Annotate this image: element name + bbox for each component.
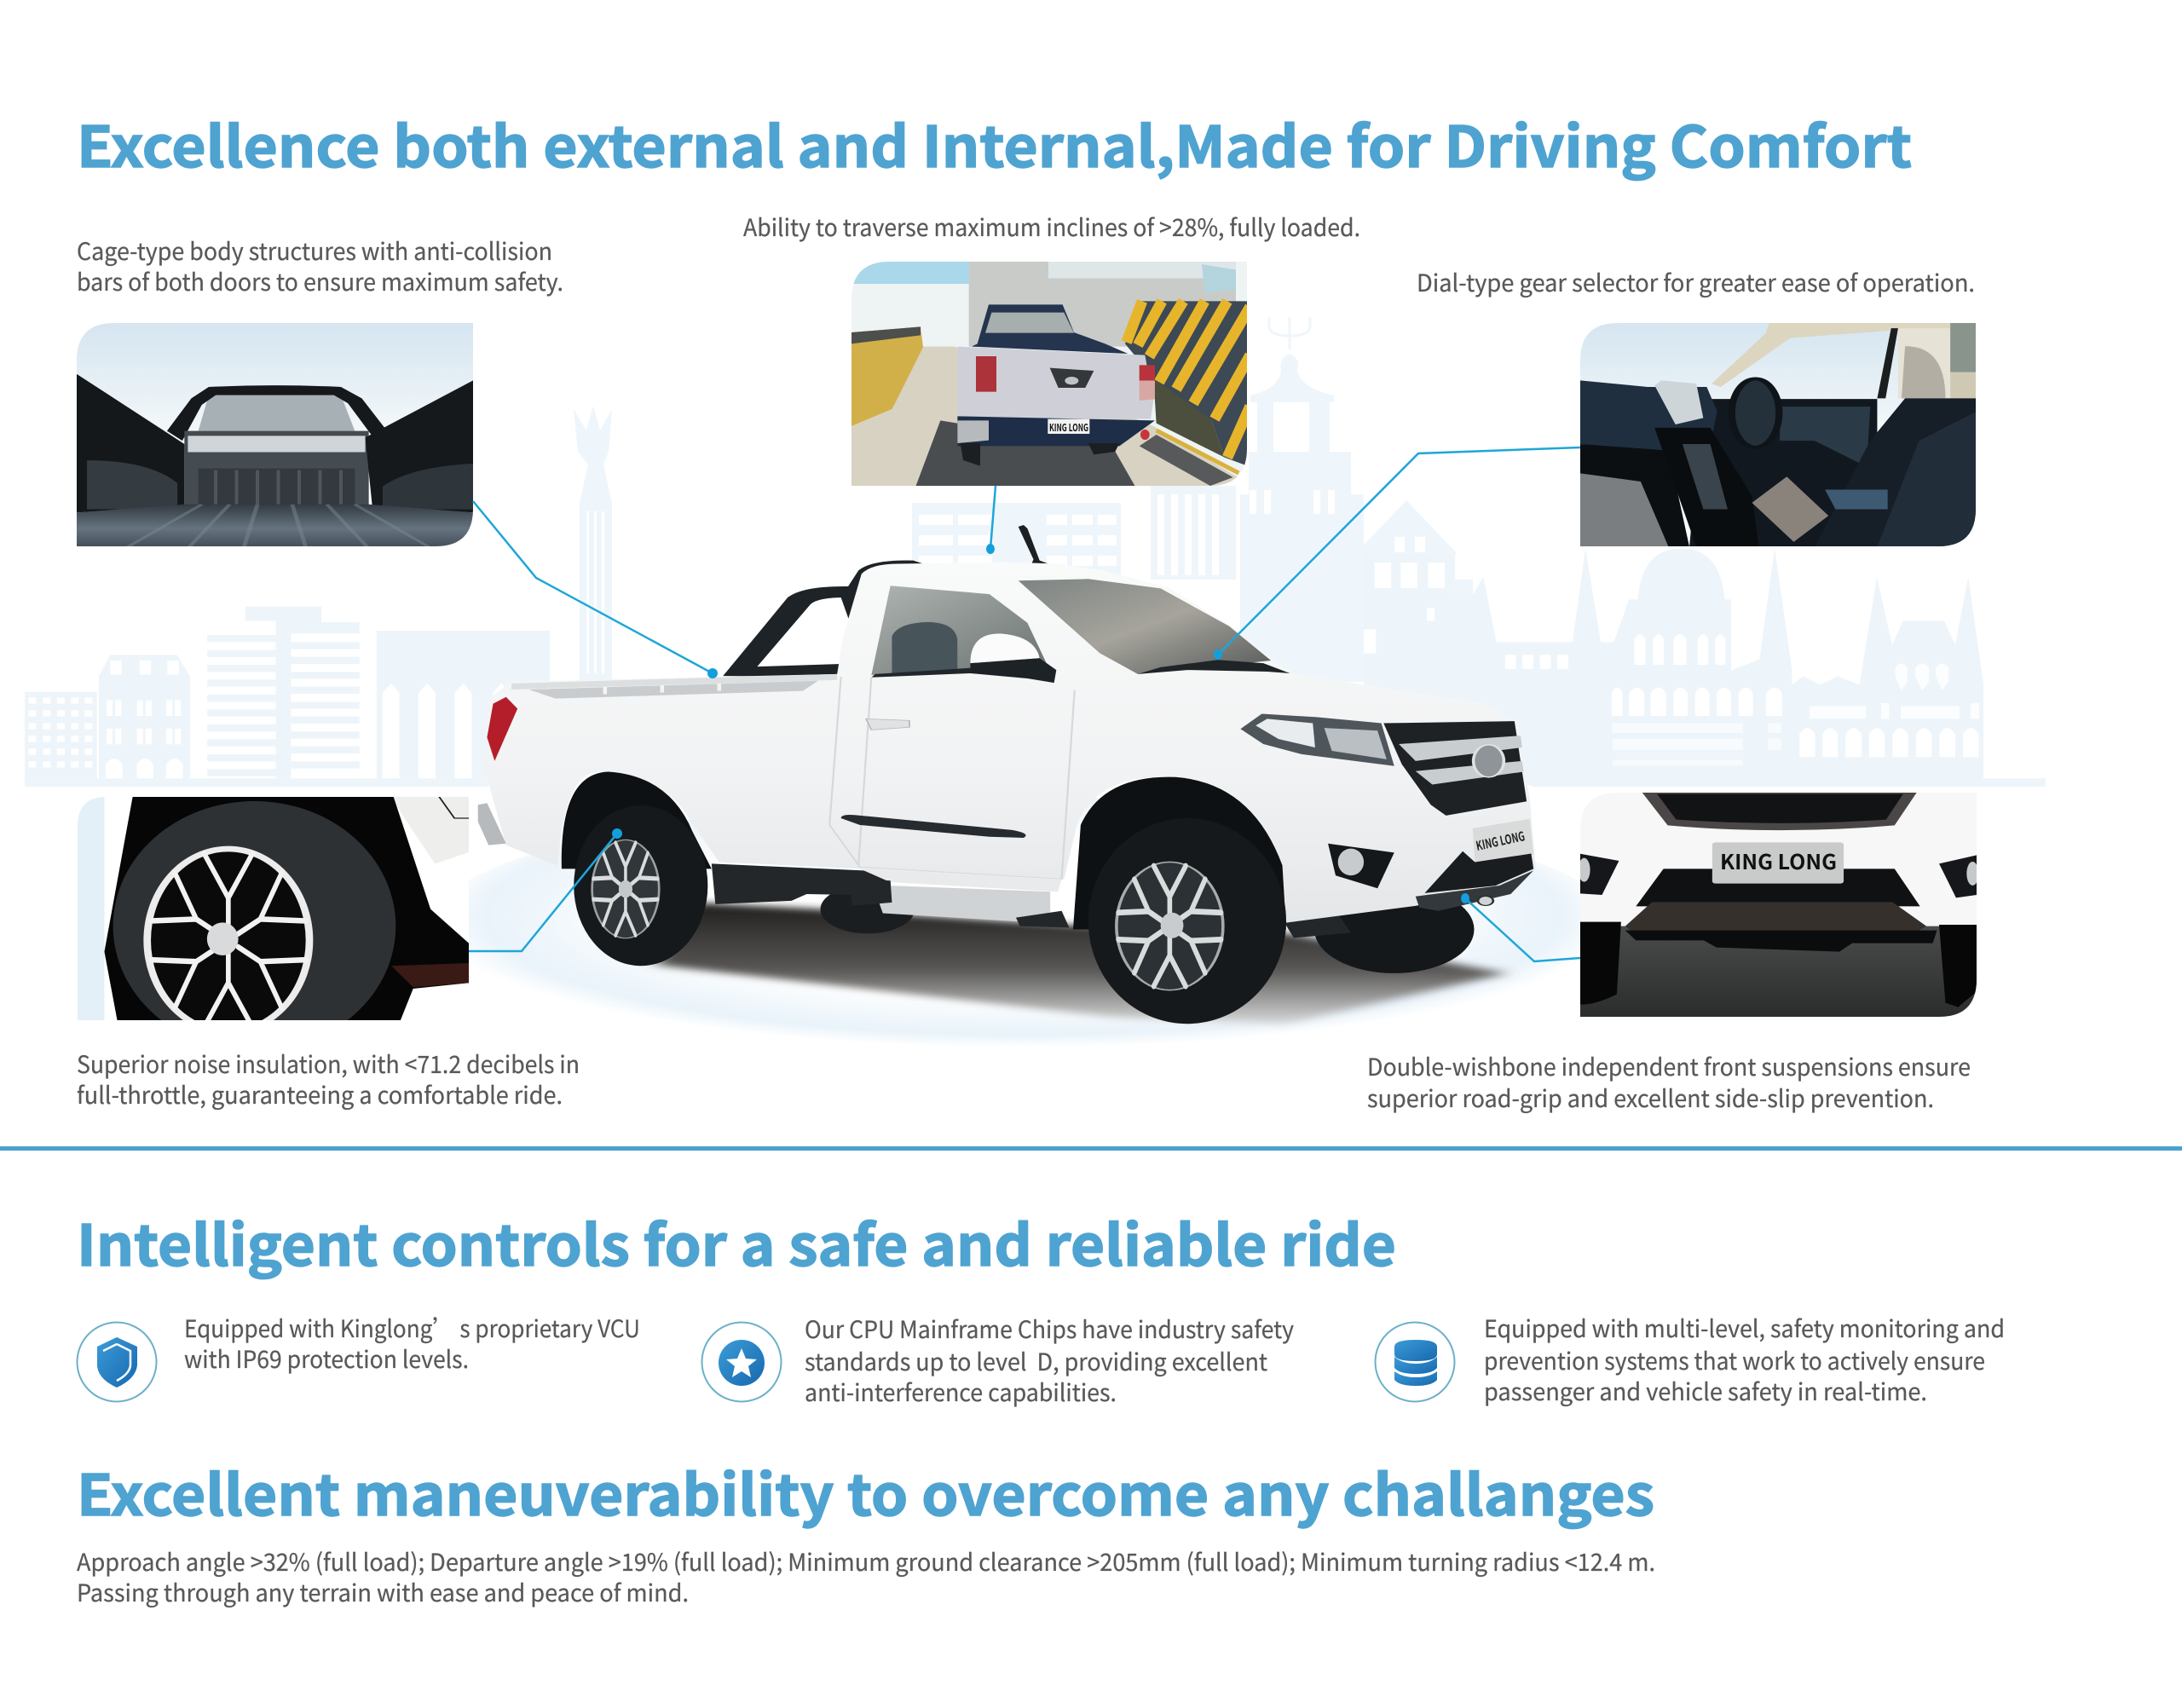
heading: intelligent controls: Intelligent controls for a safe and reliable ride: [77, 1201, 1396, 1283]
running board: [849, 868, 1070, 928]
plate text: KING LONG: [1720, 845, 1837, 875]
truck shadow: [655, 903, 1507, 1024]
background: [448, 883, 469, 943]
lower intake: [1424, 851, 1533, 893]
sky: [851, 262, 1247, 486]
city skyline background: [25, 317, 2046, 787]
ground: [1580, 926, 1977, 1017]
far front wheel: [1314, 886, 1475, 973]
text: monitoring: prevention systems that work to actively ensure: [1484, 1343, 1985, 1377]
ground ellipse under truck: [426, 797, 1619, 1061]
lower intake: [1636, 868, 1920, 906]
text: monitoring: Equipped with multi-level, safety monitoring and: [1484, 1311, 2005, 1345]
plate text: KING LONG: [1049, 420, 1088, 435]
icon: star: [702, 1323, 781, 1401]
road: [851, 347, 1247, 488]
panel: cargo bed photo: [77, 323, 473, 548]
bed floor: [77, 505, 473, 548]
tires: [1580, 922, 1621, 1004]
headlight: [1240, 713, 1394, 766]
lower barrier: [1153, 378, 1225, 458]
text: maneuverability details: Passing through any terrain with ease and peace of mind.: [77, 1575, 689, 1609]
divider line: [0, 1146, 2182, 1151]
text: CPU chips: anti-interference capabilities.: [805, 1375, 1117, 1409]
tail light: [487, 697, 517, 761]
front wheel: [1088, 818, 1286, 1024]
cab window: [199, 395, 355, 431]
text: CPU chips: standards up to level D, providing excellent: [805, 1344, 1267, 1378]
text: cage-type body: bars of both doors to ensure maximum safety.: [77, 264, 563, 298]
lower seat: [1752, 476, 1828, 542]
license plate text: KING LONG: [1475, 827, 1527, 855]
mud flap: [391, 963, 469, 987]
wall: [969, 262, 1236, 347]
screen: [1654, 380, 1703, 424]
text: cage-type body: [77, 234, 563, 298]
grille: [1642, 793, 1917, 830]
text: noise insulation: full-throttle, guaranteeing a comfortable ride.: [77, 1077, 563, 1111]
cab lower: [184, 431, 369, 506]
wheel arches: [87, 460, 177, 510]
center console: [1654, 428, 1759, 547]
text: noise insulation: Superior noise insulation, with <71.2 decibels in: [77, 1047, 580, 1081]
roll bar: [723, 586, 849, 677]
icon: shield: [77, 1323, 157, 1401]
text: suspension: superior road-grip and excellent side-slip prevention.: [1367, 1081, 1934, 1115]
text: CPU chips: [805, 1312, 1294, 1409]
text: CPU chips: Our CPU Mainframe Chips have industry safety: [805, 1312, 1294, 1346]
door interior: [1689, 399, 1877, 547]
heading: maneuverability: Excellent maneuverability to overcome any challanges: [77, 1451, 1654, 1532]
alloy spokes: [151, 853, 306, 1027]
front wheel well: [1073, 777, 1286, 930]
road shadow: [915, 420, 1136, 488]
text: monitoring: [1484, 1311, 2005, 1408]
undercarriage: [1625, 931, 1937, 952]
fog lamp: [1328, 844, 1394, 888]
seat and headrest: [1902, 346, 1945, 398]
door outline: [829, 677, 1075, 879]
rear truck: [957, 304, 1155, 466]
background: [1580, 323, 1905, 431]
rear wheel well: [562, 771, 712, 868]
white bumper: [1580, 793, 1977, 1017]
text: noise insulation: [77, 1047, 580, 1111]
bed walls: [77, 374, 184, 512]
truck body: [483, 563, 1536, 923]
license plate backing: [1473, 819, 1533, 863]
connector: interior callout: [1214, 447, 1580, 660]
vehicle body: [391, 797, 469, 863]
tire: [113, 801, 395, 1020]
panel: interior photo: [1580, 323, 1977, 548]
skid plate: [1416, 870, 1533, 911]
text: maneuverability details: [77, 1544, 1655, 1609]
tow hook: [1478, 896, 1493, 905]
text: cage-type body: Cage-type body structures with anti-collision: [77, 234, 552, 268]
side mirror: [970, 633, 1056, 683]
connector: wheel callout: [469, 828, 622, 951]
icon: database: [1376, 1323, 1454, 1401]
text: VCU: Equipped with Kinglong’ s proprietary VCU: [184, 1311, 640, 1345]
wheel arch: [104, 797, 469, 1021]
fog lamps: [1580, 854, 1619, 895]
sky: [77, 323, 473, 443]
rear wheel: [574, 805, 707, 966]
dashboard: [1580, 380, 1717, 453]
roll bar: [167, 385, 390, 441]
steering wheel: [1732, 378, 1779, 447]
bed rail: [511, 674, 837, 699]
text: incline: Ability to traverse maximum inclines of >28%, fully loaded.: [743, 210, 1360, 244]
text: suspension: [1367, 1049, 1971, 1115]
cab window: [871, 586, 1047, 675]
armrest: [1825, 490, 1888, 510]
title: main heading: Excellence both external and Internal,Made for Driving Comfort: [77, 102, 1912, 184]
connector: incline callout: [986, 486, 996, 554]
wiper and cowl: [1138, 660, 1290, 674]
left rail: [851, 326, 923, 426]
text: VCU: [184, 1311, 640, 1376]
grille: [1383, 721, 1527, 816]
text: VCU: with IP69 protection levels.: [184, 1342, 469, 1376]
text: maneuverability details: Approach angle >32% (full load); Departure angle >19% (full load); Minimum ground clearance >205mm (full load); Minimum turning radius <12.4 m.: [77, 1544, 1655, 1578]
plate: [1712, 842, 1844, 884]
chassis underside: [712, 863, 891, 904]
striped barrier: [1125, 301, 1250, 466]
pickup truck: [478, 525, 1536, 1024]
text: monitoring: passenger and vehicle safety in real-time.: [1484, 1374, 1927, 1408]
panel: wheel photo: [78, 797, 469, 1020]
skid plate: [1625, 902, 1926, 935]
roof header and A pillar: [1712, 323, 1950, 387]
side molding: [841, 815, 1025, 838]
door handle: [866, 718, 909, 730]
panel: suspension photo: [1579, 793, 1978, 1017]
text: suspension: Double-wishbone independent front suspensions ensure: [1367, 1049, 1971, 1083]
connector: cargo bed callout: [473, 501, 718, 678]
connector: suspension callout: [1461, 893, 1580, 961]
antenna: [1019, 525, 1050, 564]
rear bumper: [478, 803, 506, 845]
panel: incline photo: [851, 262, 1250, 488]
hub cap: [207, 922, 239, 955]
text: gear selector: Dial-type gear selector for greater ease of operation.: [1417, 265, 1975, 299]
windshield: [1019, 579, 1271, 674]
far rear wheel: [821, 885, 915, 933]
